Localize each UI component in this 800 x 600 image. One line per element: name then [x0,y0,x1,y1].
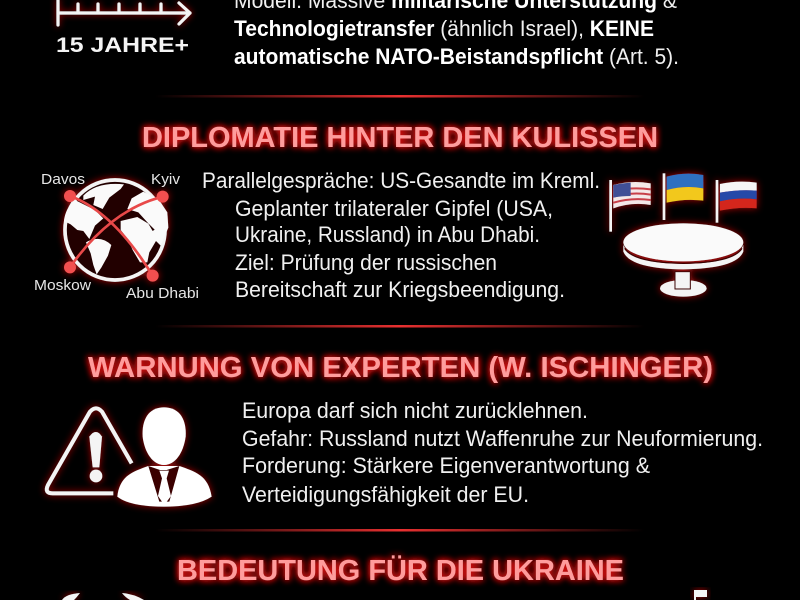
flag: Russia [720,182,757,211]
crossing routes [70,196,163,276]
city labels: Moskow [34,277,91,294]
text block: Modell: Technologietransfer (ähnlich Israel), KEINE [234,16,654,41]
city labels: Davos [41,171,85,188]
text block: Europa: Europa darf sich nicht zurücklehnen. [242,398,588,423]
icon: laurel top [62,593,144,600]
label: 15 Jahre: 15 JAHRE+ [56,34,189,57]
icon: warning and expert [47,407,212,507]
city labels [34,171,199,302]
text block: Modell: automatische NATO-Beistandspflicht (Art. 5). [234,44,679,69]
text block: Europa: Verteidigungsfähigkeit der EU. [242,482,529,507]
icon: timeline arrow [58,0,190,25]
text block: Modell [234,0,679,69]
table [623,223,743,297]
text block: Europa: Forderung: Stärkere Eigenverantwortung & [242,453,650,478]
city labels: Abu Dhabi [126,285,199,302]
flag: Ukraine [667,174,703,203]
city labels: Kyiv [151,171,181,188]
text block: Europa [242,398,763,507]
text block: Parallelgespräche: Ziel: Prüfung der russischen [235,250,497,275]
text block: Europa: Gefahr: Russland nutzt Waffenruhe zur Neuformierung. [242,426,763,451]
icon: flag top [694,590,707,600]
heading: Warnung: WARNUNG VON EXPERTEN (W. ISCHINGER) [88,352,713,384]
icon: globe with connections [64,180,169,282]
text block: Parallelgespräche: Geplanter trilateraler Gipfel (USA, [235,196,553,221]
text block: Parallelgespräche: Bereitschaft zur Kriegsbeendigung. [235,277,565,302]
heading: Diplomatie: DIPLOMATIE HINTER DEN KULISSEN [142,122,658,154]
globe continents [64,184,168,274]
text block: Parallelgespräche: Ukraine, Russland) in Abu Dhabi. [235,222,540,247]
flag: USA [613,182,651,208]
heading: Bedeutung: BEDEUTUNG FÜR DIE UKRAINE [177,555,624,587]
icon: flags and table [609,173,757,297]
text block: Parallelgespräche [202,168,600,302]
text block: Parallelgespräche: Parallelgespräche: US-Gesandte im Kreml. [202,168,600,193]
